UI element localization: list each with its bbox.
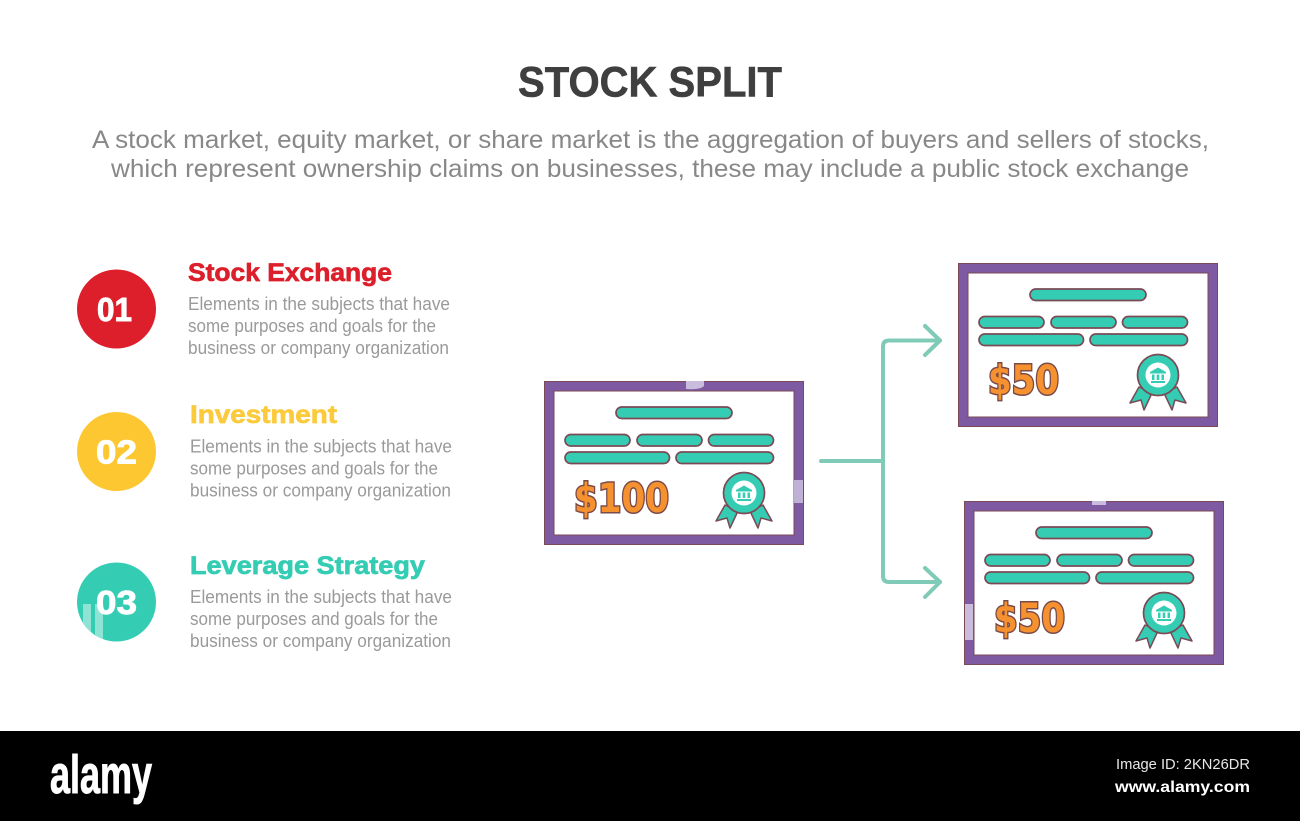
website: www.alamy.com xyxy=(1114,779,1250,796)
amount $50: $50 xyxy=(994,596,1065,642)
description 01: some purposes and goals for the xyxy=(188,316,436,336)
icon: bank medal xyxy=(1136,592,1192,648)
subtitle text block: A stock market, equity market, or share market is the aggregation of buyers and sellers of stocks, xyxy=(92,126,1209,154)
description 03 xyxy=(190,587,452,651)
description 02: Elements in the subjects that have xyxy=(190,436,452,456)
heading: leverage strategy: Leverage Strategy xyxy=(190,552,425,580)
icon: bank medal xyxy=(1130,354,1186,410)
description 01: business or company organization xyxy=(188,338,449,358)
amount $100: $100 xyxy=(574,476,669,522)
badge 02 xyxy=(77,412,156,491)
item 03: leverage strategy xyxy=(77,552,452,651)
description 03: Elements in the subjects that have xyxy=(190,587,452,607)
description 01: Elements in the subjects that have xyxy=(188,294,450,314)
title: STOCK SPLIT xyxy=(518,58,782,106)
icon: bank medal xyxy=(716,472,772,528)
footer bar xyxy=(0,731,1300,821)
heading: investment: Investment xyxy=(190,401,338,429)
description 03: some purposes and goals for the xyxy=(190,609,438,629)
image id: Image ID: 2KN26DR xyxy=(1116,756,1250,773)
item 02: investment xyxy=(77,401,452,500)
heading: stock exchange: Stock Exchange xyxy=(188,259,392,287)
item 01: stock exchange xyxy=(77,259,450,358)
description 02 xyxy=(190,436,452,500)
description 01 xyxy=(188,294,450,358)
description 03: business or company organization xyxy=(190,631,451,651)
description 02: some purposes and goals for the xyxy=(190,458,438,478)
badge 03: 03 xyxy=(96,584,137,621)
certificate: $100 share xyxy=(544,381,804,544)
logo: alamy: alamy xyxy=(50,745,152,805)
badge 01 xyxy=(77,270,156,348)
subtitle text block xyxy=(92,126,1209,183)
badge 01: 01 xyxy=(97,291,132,328)
description 02: business or company organization xyxy=(190,480,451,500)
badge 03 xyxy=(77,562,156,644)
subtitle text block: which represent ownership claims on businesses, these may include a public stock exchange xyxy=(110,155,1189,183)
amount $50: $50 xyxy=(988,358,1059,404)
badge 02: 02 xyxy=(96,434,137,470)
certificate: $50 share top xyxy=(958,264,1218,426)
certificate: $50 share bottom xyxy=(964,501,1224,664)
arrows: split into two xyxy=(821,326,940,597)
